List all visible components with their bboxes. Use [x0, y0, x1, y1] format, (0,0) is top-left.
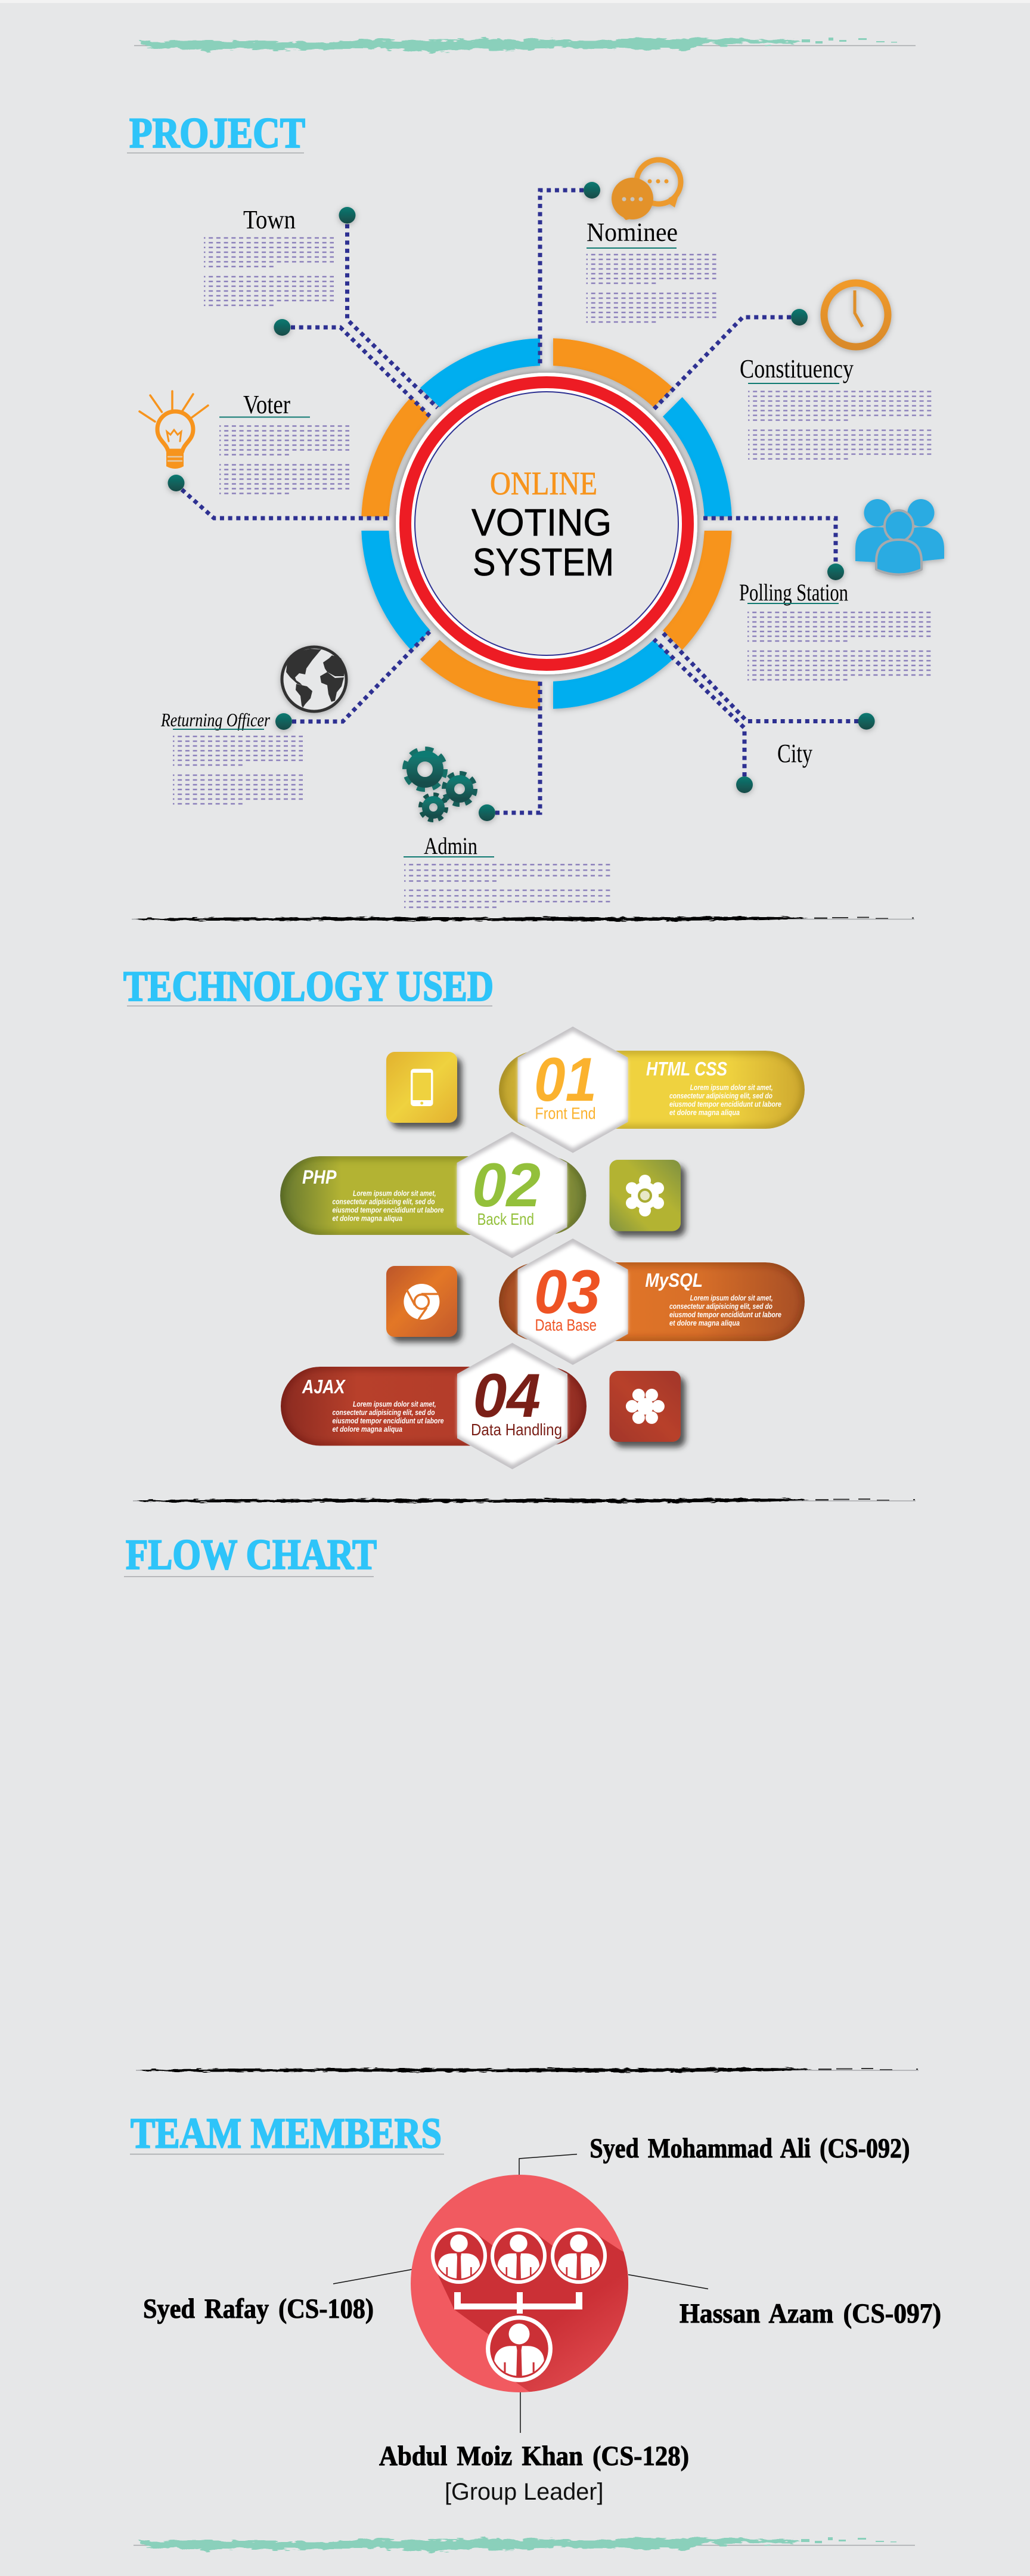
panel: back end pill: PHP [302, 1166, 337, 1188]
heading: flow chart: FLOW CHART [126, 1531, 377, 1578]
hexagon: 03 data base: Data Base [535, 1316, 597, 1335]
text block: constituency [748, 392, 933, 459]
panel: data handling pill: Lorem ipsum dolor sit amet, [353, 1400, 436, 1408]
hexagon: 01 front end: Front End [535, 1104, 596, 1123]
bottom teal brush divider [134, 2537, 915, 2552]
panel: back end pill: Lorem ipsum dolor sit amet, [353, 1189, 436, 1197]
panel: data base pill: et dolore magna aliqua [669, 1318, 740, 1327]
heading: technology used: TECHNOLOGY USED [123, 962, 494, 1010]
panel: data handling pill: et dolore magna aliqua [333, 1425, 402, 1433]
panel: data base pill: consectetur adipisicing elit, sed do [669, 1302, 772, 1311]
icon tile: chrome browser [386, 1266, 457, 1337]
divider: black brush 3 [136, 2068, 919, 2072]
long shadow [438, 2236, 628, 2392]
name: syed mohammad ali: Syed Mohammad Ali (CS-092) [590, 2133, 910, 2164]
icon tile: asterisk [609, 1371, 681, 1442]
member icon: middle [492, 2230, 545, 2282]
panel: front end pill [499, 1051, 805, 1129]
top teal brush divider [134, 38, 916, 52]
connector: constituency [654, 317, 791, 409]
panel: front end pill: et dolore magna aliqua [669, 1108, 740, 1117]
text block: town [204, 238, 334, 305]
center title: VOTING [471, 501, 612, 544]
panel: back end pill: eiusmod tempor encididunt ut labore [333, 1206, 443, 1215]
panel: data handling pill: consectetur adipisicing elit, sed do [333, 1408, 435, 1417]
label: admin: Admin [424, 832, 477, 859]
connector: returning officer [292, 631, 430, 722]
label: voter: Voter [243, 390, 290, 419]
member icon: right [553, 2230, 605, 2282]
panel: data base pill: MySQL [645, 1270, 703, 1291]
icon: gears [406, 750, 474, 819]
connector: polling station [703, 518, 836, 564]
leader lines [333, 2154, 708, 2433]
text block: voter [219, 426, 349, 494]
center title: ONLINE [490, 465, 597, 501]
panel: data handling pill: eiusmod tempor encididunt ut labore [333, 1416, 443, 1425]
text block: admin [404, 865, 612, 908]
connector: admin [495, 681, 540, 813]
panel: data base pill: eiusmod tempor encididunt ut labore [669, 1310, 781, 1319]
panel: data handling pill [281, 1367, 587, 1445]
hexagon: 01 front end [517, 1027, 628, 1153]
label: polling station: Polling Station [739, 579, 848, 606]
label: returning officer: Returning Officer [160, 709, 270, 730]
connector end dots [168, 182, 875, 821]
heading: team members: TEAM MEMBERS [131, 2110, 442, 2157]
center title: SYSTEM [473, 540, 614, 584]
central red ring [396, 373, 697, 674]
panel: data handling pill: AJAX [302, 1376, 346, 1398]
panel: front end pill: eiusmod tempor encididunt ut labore [669, 1100, 781, 1109]
name: hassan azam: Hassan Azam (CS-097) [680, 2298, 941, 2329]
connector: nominee [540, 190, 584, 366]
top light edge [0, 0, 1030, 3]
member icon: left [433, 2230, 485, 2282]
icon: light bulb [139, 391, 208, 469]
connector: town [347, 224, 438, 408]
hexagon: 04 data handling [457, 1343, 567, 1469]
panel: team circle [411, 2175, 628, 2392]
hexagon: 02 back end: 02 [472, 1151, 541, 1220]
center title [471, 465, 614, 584]
outer ring segments [361, 338, 732, 709]
icon tile: phone [386, 1052, 457, 1123]
role: group leader: [Group Leader] [445, 2479, 603, 2505]
panel: front end pill: HTML CSS [646, 1058, 728, 1079]
icon: chat bubbles [612, 160, 681, 220]
divider: black brush 1 [132, 917, 914, 921]
panel: back end pill: consectetur adipisicing elit, sed do [333, 1197, 435, 1206]
hexagon: 03 data base [517, 1239, 628, 1365]
panel: data base pill [499, 1262, 805, 1341]
divider: black brush 2 [133, 1498, 916, 1503]
panel: project circular diagram [168, 182, 875, 821]
panel: front end pill: Lorem ipsum dolor sit amet, [690, 1083, 773, 1092]
hexagon: 02 back end: Back End [477, 1210, 534, 1228]
hexagon: 03 data base: 03 [534, 1258, 600, 1327]
icon: people group [855, 499, 944, 575]
heading: project: PROJECT [129, 109, 305, 157]
connector: town second [291, 327, 430, 416]
panel: front end pill: consectetur adipisicing elit, sed do [669, 1091, 772, 1100]
text block: polling station [747, 612, 933, 680]
label: city: City [777, 739, 812, 768]
hexagon: 04 data handling: Data Handling [471, 1420, 562, 1439]
connector: city bottom [654, 639, 744, 776]
member icon: leader [488, 2318, 550, 2380]
name: syed rafay: Syed Rafay (CS-108) [143, 2293, 374, 2324]
name: abdul moiz khan: Abdul Moiz Khan (CS-128) [379, 2441, 689, 2472]
label: town: Town [243, 205, 296, 234]
panel: back end pill: et dolore magna aliqua [333, 1214, 402, 1223]
hexagon: 02 back end [457, 1132, 567, 1258]
hierarchy connector [454, 2292, 582, 2314]
text block: returning officer [173, 736, 303, 804]
label: constituency: Constituency [740, 354, 854, 383]
text block: nominee [587, 255, 716, 322]
connector: voter [182, 490, 388, 518]
icon: clock [824, 283, 888, 347]
hexagon: 04 data handling: 04 [473, 1361, 541, 1431]
hexagon: 01 front end: 01 [534, 1045, 597, 1114]
icon: globe [282, 647, 346, 711]
panel: data base pill: Lorem ipsum dolor sit amet, [690, 1293, 773, 1302]
label: nominee: Nominee [587, 218, 678, 247]
panel: back end pill [280, 1156, 587, 1235]
icon tile: settings gear [609, 1160, 681, 1231]
connector: city right [661, 631, 858, 722]
